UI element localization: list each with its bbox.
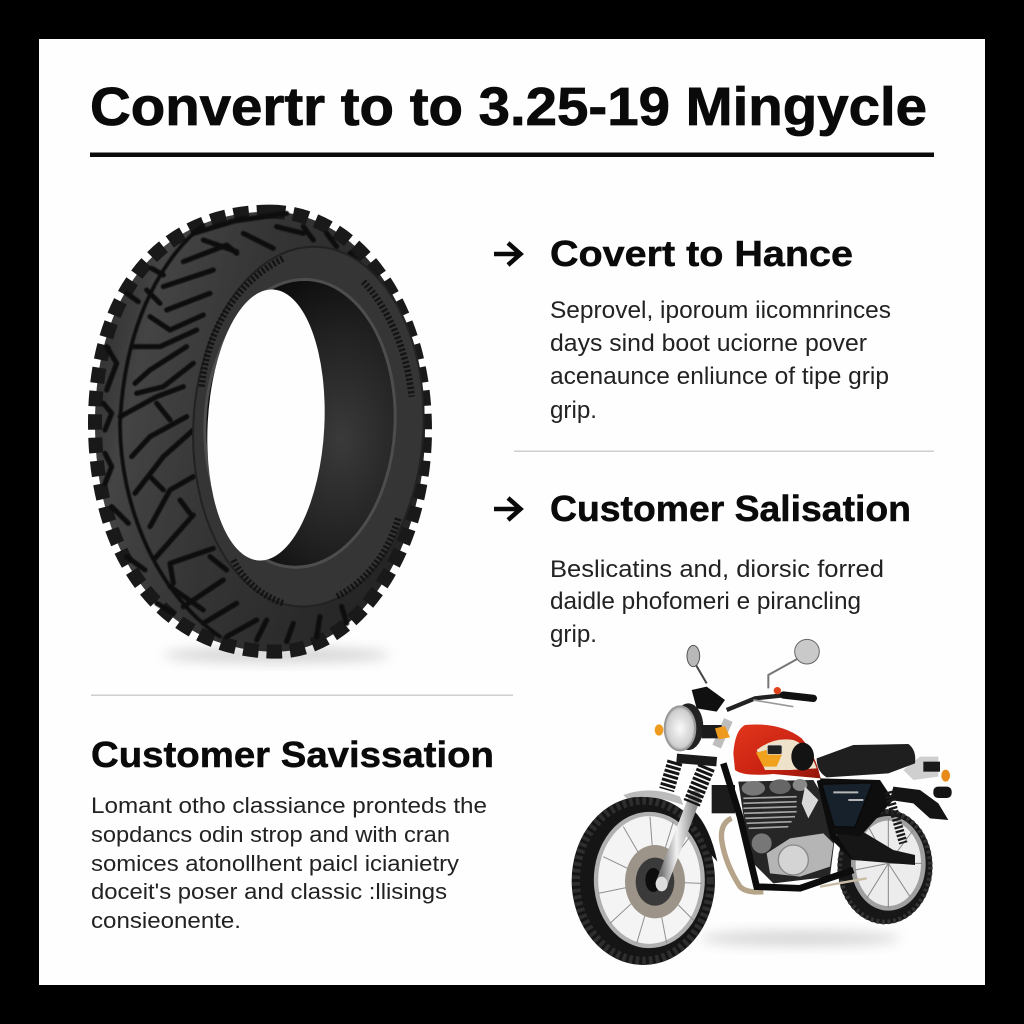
tread edge lugs [95, 212, 425, 652]
ground shadow [700, 930, 900, 946]
tread grooves [103, 213, 360, 642]
front fender rear part [688, 810, 717, 862]
text block 3: consieonente. [91, 908, 241, 933]
heading: customer savissation: Customer Savissation [91, 734, 494, 775]
text block 3: doceit's poser and classic :llisings [91, 879, 447, 904]
black subframe [820, 778, 893, 837]
rear wheel [838, 809, 932, 924]
text block 2 [550, 556, 884, 648]
motorcycle image [572, 639, 952, 965]
text block 1: Seprovel, iporoum iicomnrinces [550, 297, 891, 324]
text block 3 [91, 793, 487, 933]
swingarm [833, 830, 915, 865]
exhaust pipe [721, 818, 763, 892]
tire body [95, 212, 425, 652]
rear shock [888, 792, 903, 843]
text block 3: sopdancs odin strop and with cran [91, 822, 450, 847]
footpeg line [820, 878, 867, 887]
text block 1 [550, 297, 891, 424]
rear fender and tail [890, 757, 952, 820]
text block 1: days sind boot uciorne pover [550, 330, 867, 357]
heading: customer salisation: Customer Salisation [550, 488, 911, 529]
side panel [822, 783, 873, 827]
side panel badges [833, 792, 863, 800]
front wheel [572, 796, 715, 965]
text block 1: grip. [550, 397, 597, 424]
text block 3: Lomant otho classiance pronteds the [91, 793, 487, 818]
fuel tank [733, 724, 821, 778]
instrument and handlebar [692, 687, 813, 712]
seat [817, 744, 915, 777]
tire shadow [163, 647, 390, 663]
title: Convertr to to 3.25-19 Mingycle [90, 77, 927, 137]
sidewall lettering marks [202, 258, 412, 603]
arrow 2 [494, 498, 520, 520]
inner barrel [198, 275, 402, 572]
text block 1: acenaunce enliunce of tipe grip [550, 363, 889, 390]
text block 3: somices atonollhent paicl icianietry [91, 851, 460, 876]
text block 2: Beslicatins and, diorsic forred [550, 556, 884, 583]
mirrors [687, 639, 819, 688]
front fender [623, 790, 683, 805]
fork [656, 720, 728, 891]
tire image [95, 212, 433, 663]
text block 2: daidle phofomeri e pirancling [550, 588, 861, 615]
text block 2: grip. [550, 621, 597, 648]
engine [712, 779, 835, 883]
frame [723, 763, 913, 888]
tire sidewall [184, 241, 433, 612]
heading: covert to hance: Covert to Hance [550, 233, 853, 274]
headlight [655, 703, 730, 750]
arrow 1 [494, 243, 520, 265]
tire hole [201, 286, 331, 564]
